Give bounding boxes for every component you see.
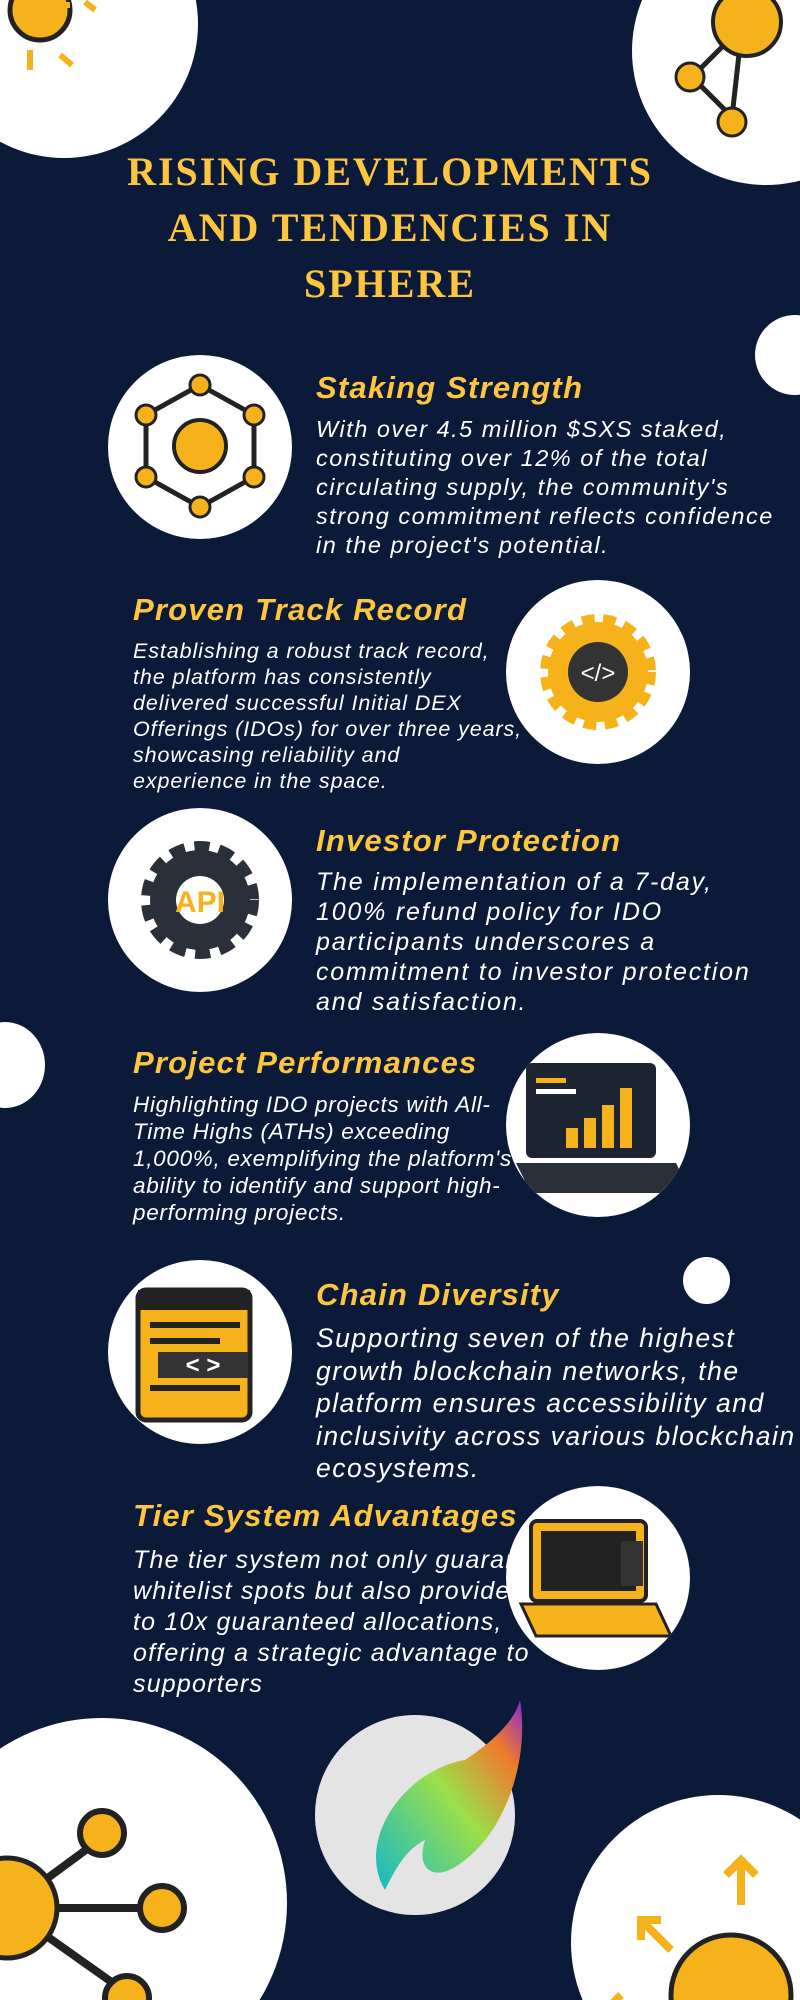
title [127,149,653,306]
icon: laptop chart [506,1033,690,1217]
text: Tier System Advantages [133,1546,572,1698]
text: Investor Protection: 100% refund policy for IDO [316,898,663,926]
text: Tier System Advantages: to 10x guaranteed allocations, [133,1608,503,1636]
decorative circle bottom-right [571,1795,800,2000]
decorative small circle [683,1257,730,1304]
text: Proven Track Record: showcasing reliability and [133,743,400,767]
text: Proven Track Record: the platform has consistently [133,665,432,689]
decorative circle right edge [755,315,800,395]
text: Project Performances [132,1092,512,1225]
text: Staking Strength: With over 4.5 million $SXS staked, [316,416,727,442]
text: Tier System Advantages: offering a strategic advantage to [133,1639,530,1667]
icon: code gear [506,580,690,764]
icon: API gear: API [175,886,225,919]
text: Project Performances: Time Highs (ATHs) exceeding [133,1119,450,1144]
text: Chain Diversity: inclusivity across various blockchain [316,1420,796,1450]
title: SPHERE [304,261,476,306]
text: Project Performances: ability to identify and support high- [133,1173,500,1198]
decorative circle top-left [0,0,198,158]
text: Investor Protection [315,868,751,1016]
text: Proven Track Record: experience in the space. [133,769,388,793]
decorative circle bottom-left [0,1718,287,2000]
heading: Investor Protection: Investor Protection [316,823,621,858]
text: Investor Protection: commitment to investor protection [316,958,751,986]
text: Chain Diversity: Supporting seven of the highest [316,1323,735,1353]
text: Proven Track Record: Establishing a robust track record, [133,639,490,663]
text: Investor Protection: participants underscores a [316,928,656,956]
title: RISING DEVELOPMENTS [127,149,653,194]
icon: network sphere [108,355,292,539]
icon: browser code: < > [186,1352,220,1379]
icon: laptop [506,1486,690,1670]
text: Proven Track Record [133,639,522,793]
text: Chain Diversity: platform ensures accessibility and [316,1388,765,1418]
text: Chain Diversity: growth blockchain networks, the [316,1356,740,1386]
text: Project Performances: 1,000%, exemplifying the platform's [133,1146,512,1171]
title: AND TENDENCIES IN [168,205,612,250]
decorative circle top-right [632,0,800,185]
text: Investor Protection: and satisfaction. [316,988,527,1016]
heading: Staking Strength: Staking Strength [316,370,583,405]
text: Project Performances: performing projects. [133,1200,346,1225]
heading: Chain Diversity: Chain Diversity [316,1277,560,1312]
heading: Tier System Advantages: Tier System Advantages [133,1498,518,1533]
text: Proven Track Record: Offerings (IDOs) for over three years, [133,717,522,741]
text: Tier System Advantages: supporters [133,1670,263,1698]
text: Staking Strength: in the project's potential. [316,532,609,558]
decorative circle left edge [0,1022,45,1108]
icon: code gear: </> [581,660,615,687]
text: Project Performances: Highlighting IDO projects with All- [133,1092,491,1117]
text: Staking Strength: circulating supply, the community's [316,474,729,500]
text: Staking Strength: constituting over 12% of the total [316,445,708,471]
text: Tier System Advantages: The tier system not only guarantees [133,1546,572,1574]
logo [315,1700,522,1915]
text: Chain Diversity [315,1323,796,1483]
heading: Project Performances: Project Performances [133,1045,477,1080]
text: Proven Track Record: delivered successful Initial DEX [133,691,462,715]
text: Investor Protection: The implementation of a 7-day, [316,868,713,896]
text: Staking Strength: strong commitment reflects confidence [316,503,774,529]
text: Staking Strength [316,416,774,558]
heading: Proven Track Record: Proven Track Record [133,592,467,627]
icon: browser code [108,1260,292,1444]
text: Chain Diversity: ecosystems. [316,1453,480,1483]
icon: API gear [108,808,292,992]
text: Tier System Advantages: whitelist spots but also provides up [133,1577,563,1605]
